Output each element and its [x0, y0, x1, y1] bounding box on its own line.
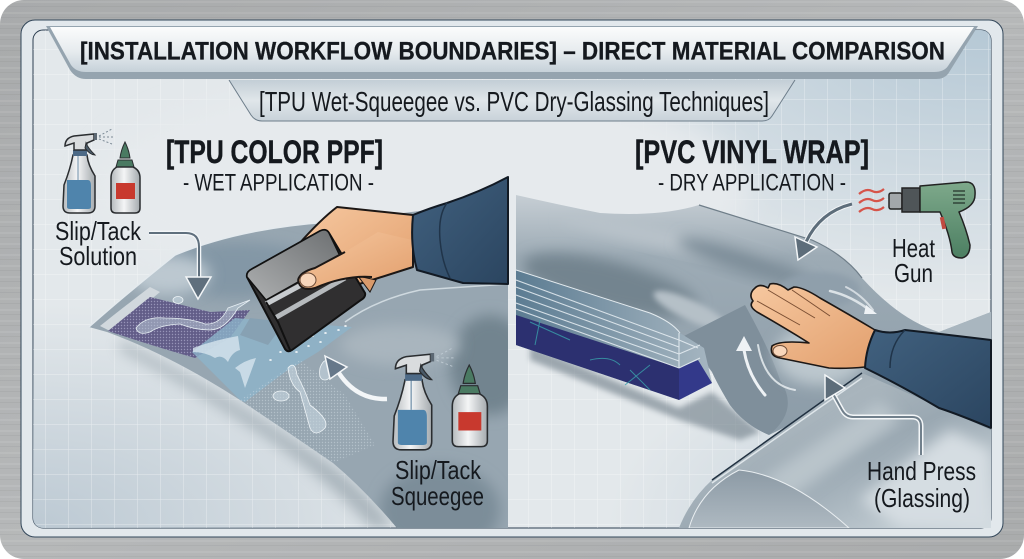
subtitle text: [TPU Wet-Squeegee vs. PVC Dry-Glassing Techniques]	[259, 86, 769, 117]
front sheet	[679, 373, 991, 528]
label: heat gun	[892, 233, 936, 288]
arrow: solution to film	[149, 233, 211, 299]
arrow: squeegee label to film	[325, 356, 387, 399]
left panel: TPU wet application	[56, 129, 509, 528]
label: heat gun: Gun	[894, 258, 933, 288]
vinyl film illustration with body panel	[516, 195, 991, 528]
icon: tack bottle	[452, 365, 487, 447]
label: hand press glassing: Hand Press	[867, 456, 976, 486]
icon: motion arrows	[736, 287, 877, 395]
label: hand press glassing: (Glassing)	[874, 483, 970, 513]
subheading: wet application: - WET APPLICATION -	[183, 170, 374, 196]
icon: heat gun	[859, 182, 975, 258]
film illustration with water	[90, 210, 508, 528]
icon: water droplets	[136, 296, 346, 433]
label: slip/tack solution	[55, 216, 142, 271]
icon: squeegee	[247, 230, 365, 351]
sleeve, right arm	[865, 330, 991, 428]
label: hand press glassing	[867, 456, 976, 513]
arrow: hand press label to hand	[825, 375, 921, 455]
icon group: spray bottle and tack bottle, top	[63, 129, 140, 213]
thumb on squeegee	[298, 232, 412, 289]
subheading: dry application: - DRY APPLICATION -	[658, 170, 846, 196]
icon: spray bottle	[63, 129, 113, 213]
hand back behind squeegee	[298, 207, 413, 292]
title text: [INSTALLATION WORKFLOW BOUNDARIES] – DIRECT MATERIAL COMPARISON	[80, 38, 945, 66]
label: slip/tack squeegee: Squeegee	[391, 481, 484, 511]
label: slip/tack squeegee: Slip/Tack	[395, 455, 482, 485]
arrow: heat gun to film	[795, 204, 852, 260]
heading: TPU color PPF: [TPU COLOR PPF]	[166, 134, 383, 170]
icon: tack bottle	[111, 142, 140, 213]
heading: PVC vinyl wrap: [PVC VINYL WRAP]	[635, 134, 869, 170]
hand pressing film	[751, 284, 875, 368]
title banner	[46, 26, 978, 79]
label: slip/tack squeegee	[391, 455, 484, 511]
subtitle plate	[229, 80, 795, 121]
label: slip/tack solution: Solution	[59, 241, 137, 271]
right panel: PVC dry application	[516, 134, 991, 528]
icon group: spray bottle and tack bottle, lower	[393, 348, 487, 450]
label: heat gun: Heat	[892, 233, 936, 263]
label: slip/tack solution: Slip/Tack	[55, 216, 142, 246]
icon: spray bottle	[393, 348, 454, 450]
sleeve, left arm	[412, 177, 508, 284]
glass layers	[516, 270, 712, 400]
